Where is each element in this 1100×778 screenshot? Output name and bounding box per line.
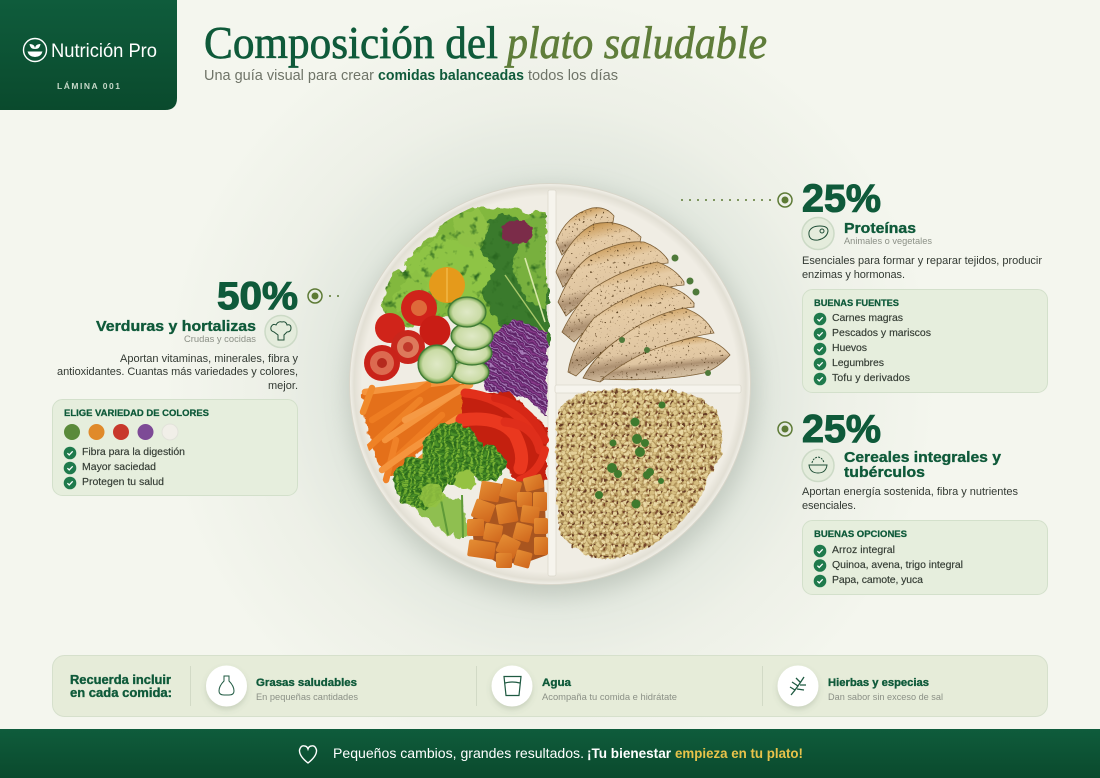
item: agua: Acompaña tu comida e hidrátate <box>542 692 677 703</box>
colour swatches <box>64 424 178 440</box>
item: grasas saludables <box>206 666 358 706</box>
food: lettuce <box>382 206 547 345</box>
logo panel <box>0 0 177 110</box>
box: colores <box>52 400 298 496</box>
heading: Proteínas <box>844 220 916 237</box>
item: agua: Agua <box>542 677 572 689</box>
heading: Verduras y hortalizas <box>96 318 256 335</box>
reminder heading: en cada comida: <box>70 686 172 700</box>
box: fuentes: Huevos <box>832 342 867 354</box>
subheading: Crudas y cocidas <box>184 334 256 345</box>
panel: proteinas <box>682 178 1048 392</box>
food: quinoa <box>556 389 722 560</box>
box: colores: ELIGE VARIEDAD DE COLORES <box>64 408 209 418</box>
paragraph <box>802 486 1018 512</box>
panel: cereales <box>778 408 1048 594</box>
food on plate <box>362 206 730 569</box>
connector: verduras <box>308 289 339 303</box>
food: chicken slices <box>556 208 730 382</box>
box: opciones <box>802 520 1048 594</box>
herb sprigs on chicken <box>619 254 711 376</box>
logo panel: Nutrición Pro <box>51 41 157 62</box>
paragraph: Aportan vitaminas, minerales, fibra y <box>120 353 298 365</box>
plate illustration <box>348 184 756 596</box>
box: fuentes: Legumbres <box>832 357 884 369</box>
plate dividers <box>548 190 741 576</box>
paragraph <box>57 353 298 392</box>
subtitle: Una guía visual para crear <box>204 68 374 84</box>
box: opciones: Papa, camote, yuca <box>832 574 923 586</box>
footer message: ¡Tu bienestar <box>587 745 672 761</box>
title <box>204 17 767 68</box>
item: hierbas: Hierbas y especias <box>828 677 929 689</box>
box: opciones: BUENAS OPCIONES <box>814 529 907 539</box>
item: grasas saludables: Grasas saludables <box>256 677 357 689</box>
title: Composición del <box>204 17 498 68</box>
subtitle: todos los días <box>528 68 618 84</box>
icon: meat <box>802 218 834 250</box>
reminder bar <box>52 656 1048 716</box>
title: plato saludable <box>504 17 767 68</box>
icon: logo bowl with leaves <box>24 38 46 62</box>
food: tomatoes <box>364 267 465 381</box>
connector: proteinas <box>682 193 792 207</box>
box: fuentes: BUENAS FUENTES <box>814 298 899 308</box>
heading: Cereales integrales y <box>844 449 1002 466</box>
paragraph <box>802 255 1042 281</box>
item: grasas saludables: En pequeñas cantidades <box>256 692 358 703</box>
item: hierbas <box>778 666 943 706</box>
paragraph: Aportan energía sostenida, fibra y nutrientes <box>802 486 1018 498</box>
heading: tubérculos <box>844 464 925 481</box>
footer message: empieza en tu plato! <box>675 745 803 761</box>
box: opciones: Quinoa, avena, trigo integral <box>832 559 963 571</box>
box: fuentes: Carnes magras <box>832 312 903 324</box>
paragraph: esenciales. <box>802 500 856 512</box>
box: colores: Fibra para la digestión <box>82 446 185 458</box>
footer message <box>333 745 803 761</box>
paragraph: mejor. <box>268 380 298 392</box>
box: fuentes: Tofu y derivados <box>832 372 910 384</box>
food: broccoli <box>394 422 505 538</box>
food: sweet potato cubes <box>467 474 548 569</box>
box: colores: Protegen tu salud <box>82 476 164 488</box>
footer band <box>0 729 1100 778</box>
subtitle <box>204 68 618 84</box>
percentage 25: 25% <box>802 408 881 451</box>
food: radicchio <box>501 220 533 244</box>
box: fuentes <box>802 290 1048 392</box>
box: fuentes: Pescados y mariscos <box>832 327 931 339</box>
reminder heading: Recuerda incluir <box>70 673 171 687</box>
food: cucumbers <box>418 297 493 384</box>
food: red cabbage <box>482 320 547 417</box>
icon: broccoli <box>265 316 297 348</box>
panel: verduras <box>52 275 339 496</box>
heading <box>844 449 1002 481</box>
food: carrots <box>362 380 470 480</box>
item: agua <box>492 666 677 706</box>
footer message: Pequeños cambios, grandes resultados. <box>333 745 584 761</box>
icon: bowl <box>802 450 834 482</box>
percentage 50: 50% <box>217 275 298 318</box>
icon: heart <box>299 746 317 763</box>
item: hierbas: Dan sabor sin exceso de sal <box>828 692 943 703</box>
subtitle: comidas balanceadas <box>378 68 524 84</box>
food: red peppers <box>462 392 547 488</box>
percentage 25: 25% <box>802 178 881 220</box>
reminder heading <box>70 673 172 700</box>
paragraph: antioxidantes. Cuantas más variedades y colores, <box>57 366 298 378</box>
connector: cereales <box>778 422 792 436</box>
logo panel: LÁMINA 001 <box>57 81 120 91</box>
paragraph: enzimas y hormonas. <box>802 269 905 281</box>
subheading: Animales o vegetales <box>844 236 932 247</box>
box: opciones: Arroz integral <box>832 544 895 556</box>
paragraph: Esenciales para formar y reparar tejidos, producir <box>802 255 1042 267</box>
box: colores: Mayor saciedad <box>82 461 156 473</box>
